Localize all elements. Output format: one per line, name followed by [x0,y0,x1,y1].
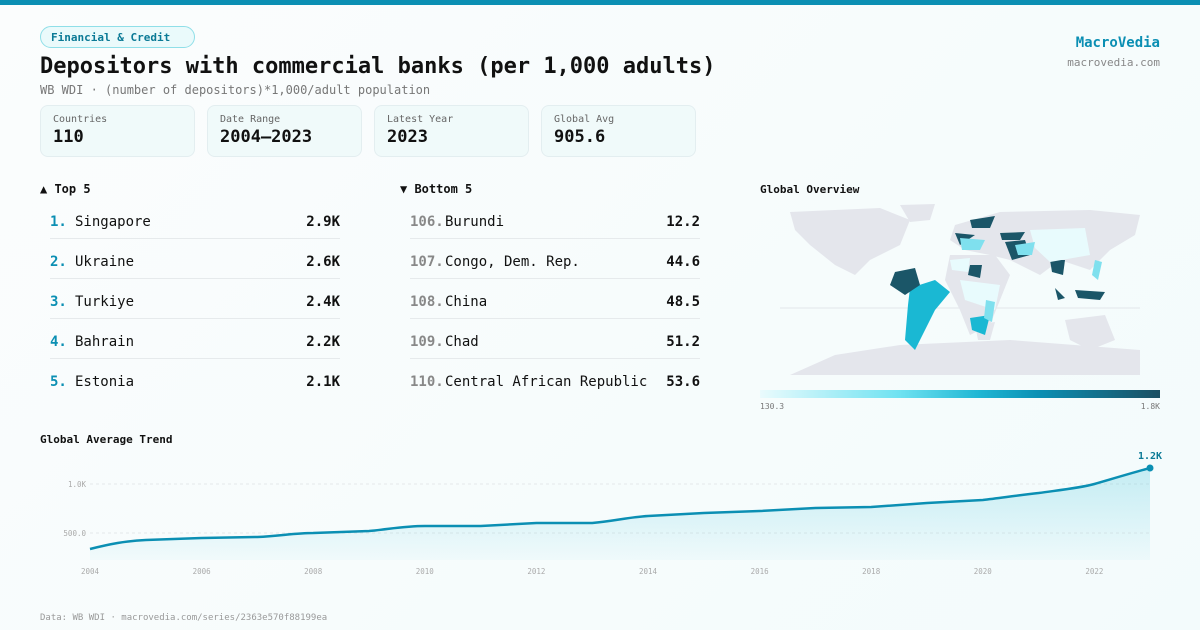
card: latest year: Latest Year [387,114,453,125]
panel: top 5: 2.1K [306,374,340,390]
panel: bottom 5: 51.2 [666,334,700,350]
legend: color scale [760,390,1160,411]
card: countries [40,105,195,157]
panel: bottom 5: 110. [410,374,444,390]
brand [1067,35,1160,69]
brand: macrovedia.com [1067,56,1160,69]
line chart: trend: 2018 [862,567,881,576]
panel: top 5: 3. [50,294,67,310]
panel: top 5: 2.2K [306,334,340,350]
panel: bottom 5: 53.6 [666,374,700,390]
panel: bottom 5: China [445,294,487,310]
card: date range [207,105,362,157]
line chart: trend: 2008 [304,567,323,576]
panel: top 5: Singapore [75,214,151,230]
stat cards [40,105,696,157]
panel: bottom 5: Central African Republic [445,374,647,390]
line chart: trend: 2006 [193,567,211,576]
card: global avg: Global Avg [554,114,614,125]
heading: global average trend: Global Average Trend [40,433,172,446]
panel: top 5 [40,182,340,390]
footer: source: Data: WB WDI · macrovedia.com/series/2363e570f88199ea [40,613,327,623]
card: date range: 2004–2023 [220,127,312,147]
panel: top 5: 5. [50,374,67,390]
heading: global overview: Global Overview [760,183,859,196]
card: date range: Date Range [220,114,280,125]
line chart: trend: 2010 [416,567,434,576]
card: countries: Countries [53,114,107,125]
panel: bottom 5: Congo, Dem. Rep. [445,254,580,270]
panel: top 5: Turkiye [75,294,134,310]
card: latest year [374,105,529,157]
brand: MacroVedia [1076,35,1160,51]
card: global avg: 905.6 [554,127,605,147]
panel: bottom 5: Chad [445,334,479,350]
map [780,204,1140,375]
panel: bottom 5: 48.5 [666,294,700,310]
panel: top 5: 2.4K [306,294,340,310]
legend: color scale: 1.8K [1141,402,1160,411]
line chart: trend: 2012 [527,567,545,576]
panel: top 5: 2. [50,254,67,270]
panel: bottom 5: 107. [410,254,444,270]
line chart: trend: 500.0 [63,529,86,538]
heading: bottom 5: ▼ Bottom 5 [400,182,472,196]
heading: top 5: ▲ Top 5 [40,182,91,196]
panel: top 5: 1. [50,214,67,230]
line chart: trend: 2020 [974,567,992,576]
panel: top 5: Bahrain [75,334,134,350]
panel: top 5: 2.9K [306,214,340,230]
panel: top 5: 4. [50,334,67,350]
panel: bottom 5: 106. [410,214,444,230]
title: Depositors with commercial banks (per 1,000 adults) [40,54,716,79]
panel: bottom 5: 109. [410,334,444,350]
legend: color scale: 130.3 [760,402,784,411]
card: latest year: 2023 [387,127,428,147]
card: countries: 110 [53,127,84,147]
panel: top 5: Estonia [75,374,134,390]
panel: top 5: Ukraine [75,254,134,270]
tag: category [40,26,195,48]
panel: bottom 5: Burundi [445,214,504,230]
panel: top 5: 2.6K [306,254,340,270]
panel: bottom 5 [400,182,700,390]
line chart: trend [63,451,1162,576]
line chart: trend: 2022 [1085,567,1103,576]
line chart: trend: 2016 [751,567,769,576]
line chart: trend: 2004 [81,567,100,576]
panel: bottom 5: 108. [410,294,444,310]
card: global avg [541,105,696,157]
panel: bottom 5: 12.2 [666,214,700,230]
subtitle: WB WDI · (number of depositors)*1,000/adult population [40,83,430,97]
top bar [0,0,1200,5]
line chart: trend: 2014 [639,567,658,576]
line chart: trend: 1.2K [1138,451,1162,462]
panel: bottom 5: 44.6 [666,254,700,270]
line chart: trend: 1.0K [68,480,86,489]
tag: category: Financial & Credit [51,31,170,44]
